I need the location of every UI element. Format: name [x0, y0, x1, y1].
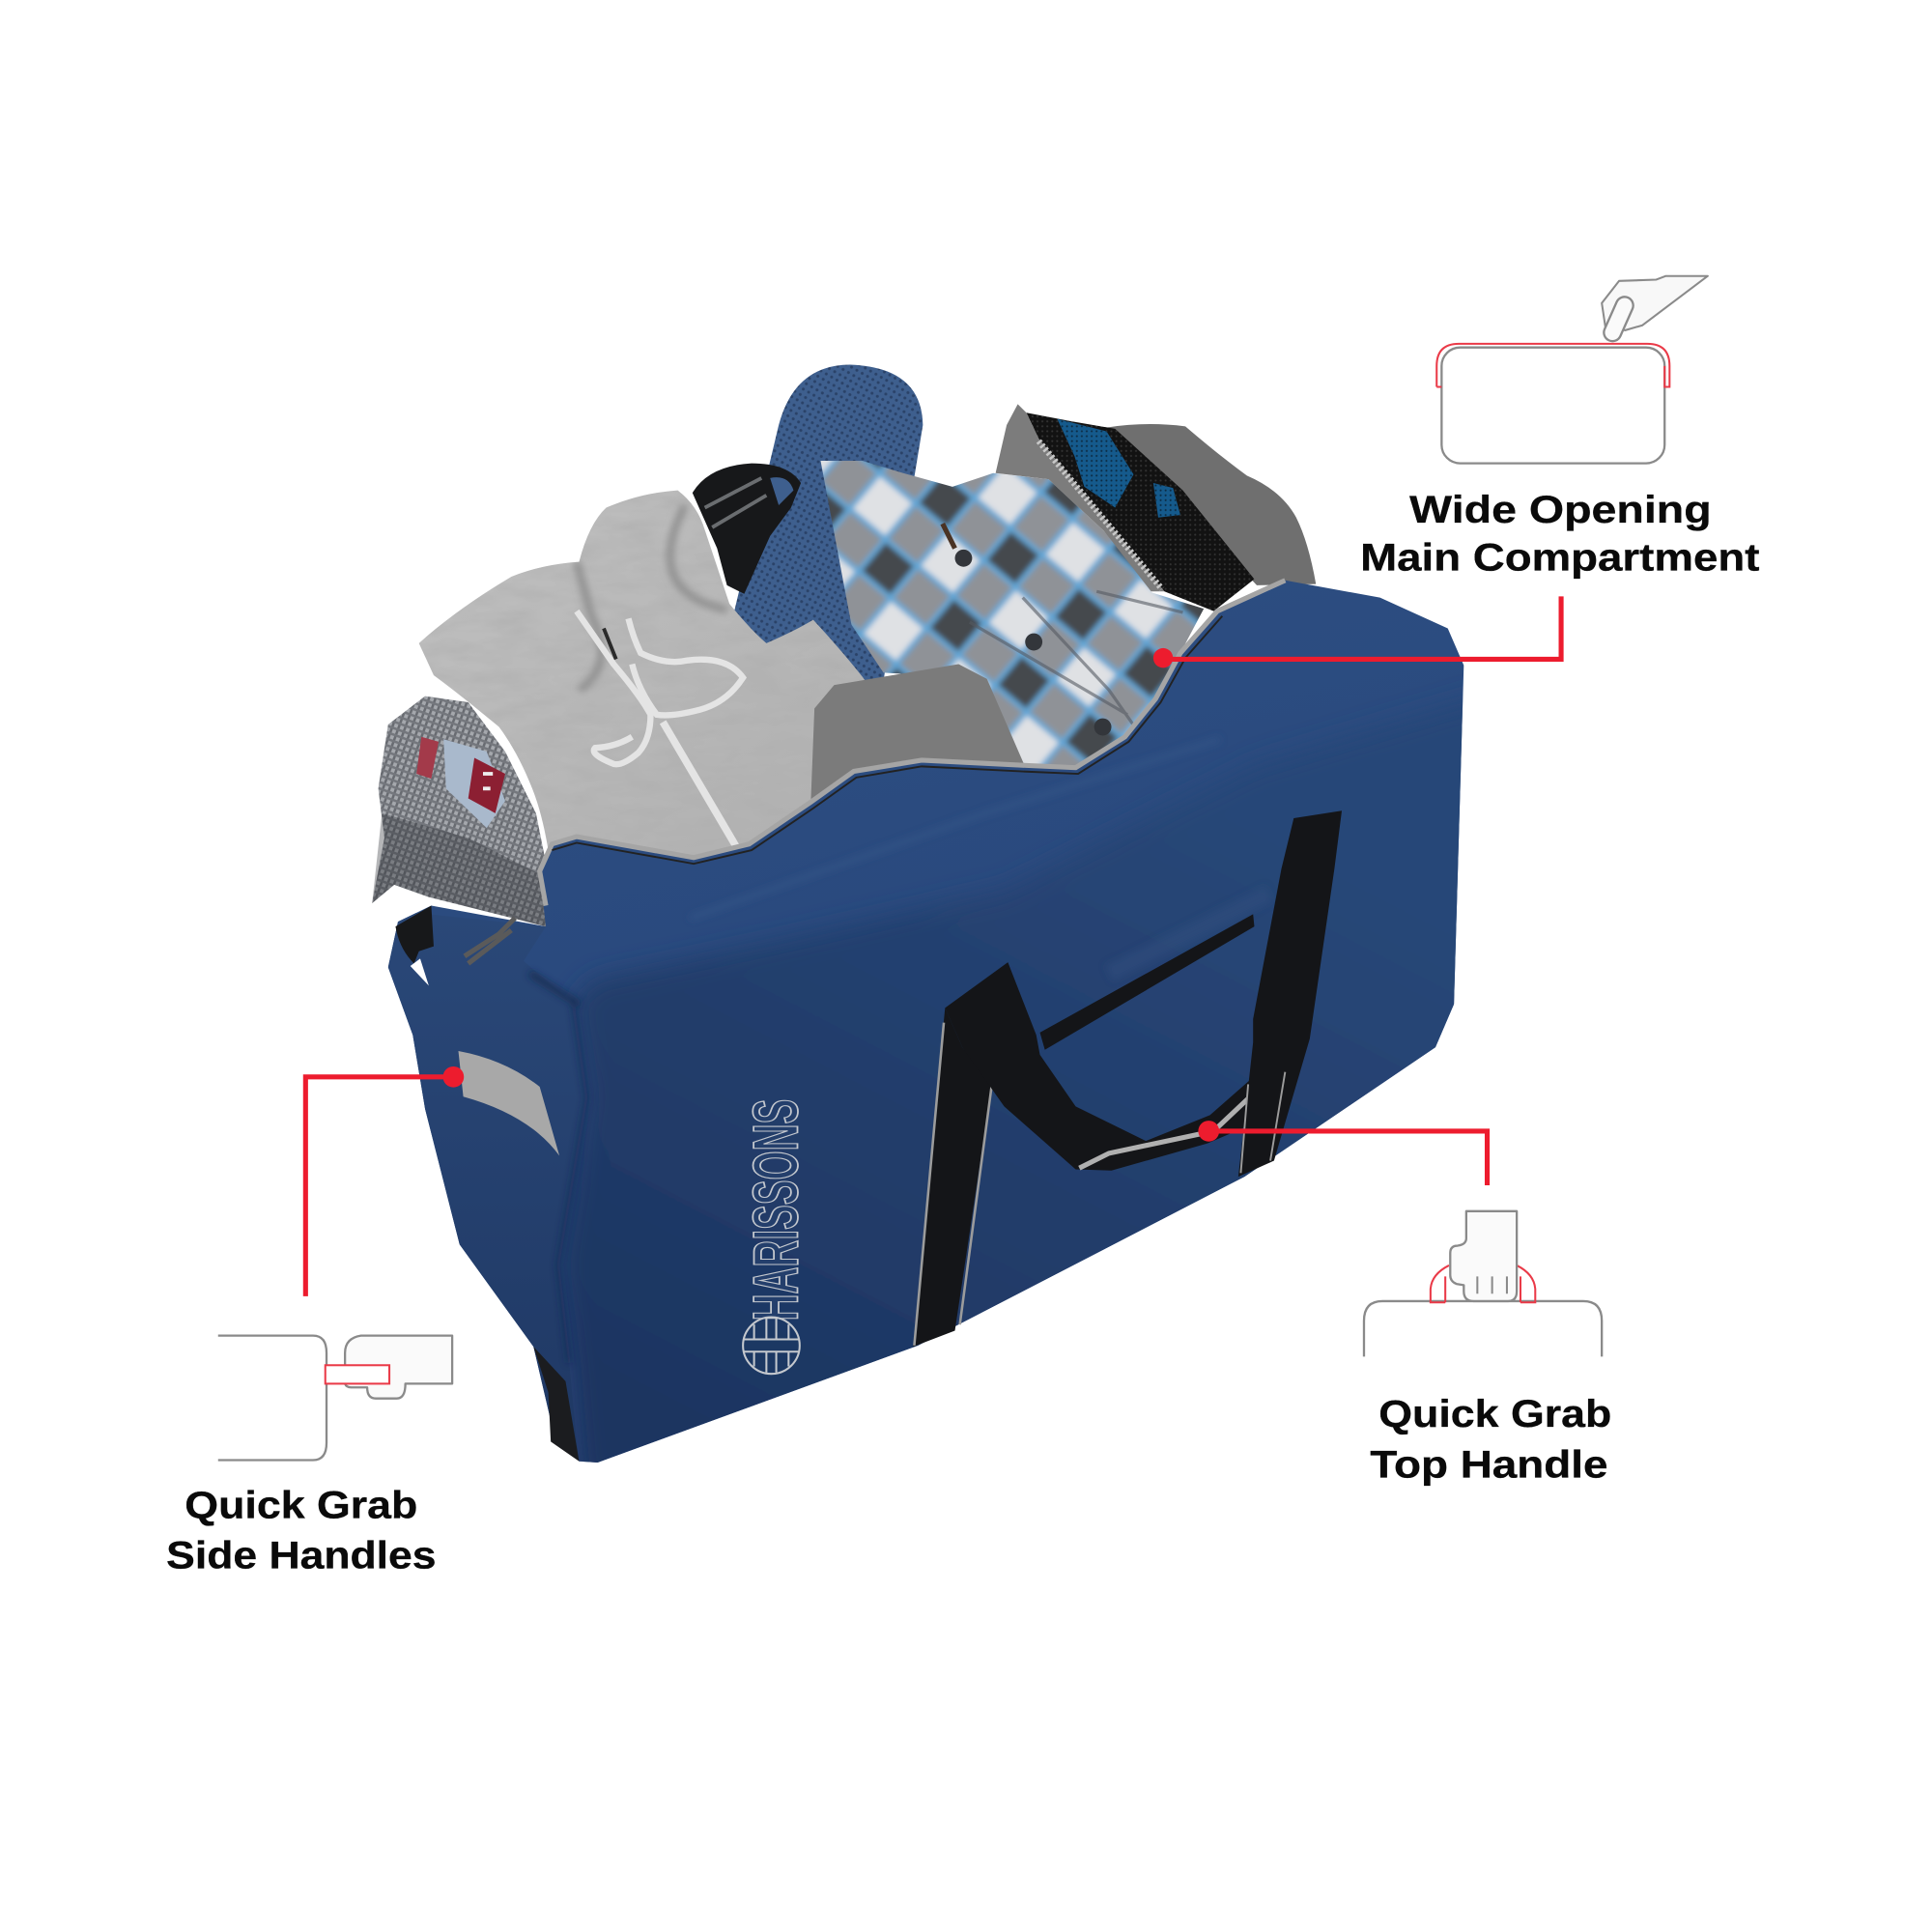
duffel body: [370, 581, 1503, 1491]
handle loop: [945, 962, 1276, 1171]
shirt buttons: [955, 550, 1112, 735]
label: quick grab top handle: [1370, 1393, 1611, 1486]
product photo: packed duffel bag: [370, 365, 1503, 1491]
label: quick grab side handles: Quick Grab: [185, 1484, 417, 1526]
icon hand: [1602, 276, 1708, 330]
label: quick grab top handle: Quick Grab: [1378, 1393, 1611, 1435]
callout: wide opening pointer: [1153, 596, 1561, 668]
reflective piping: [914, 1023, 992, 1346]
duffel side panel: [388, 913, 578, 1447]
logo emblem: [743, 1318, 800, 1374]
bottom corner black trim: [533, 1347, 579, 1462]
black stripe left: [913, 1008, 992, 1347]
shirt placket seams: [970, 589, 1183, 724]
label: quick grab top handle: Top Handle: [1370, 1443, 1608, 1486]
icon: side handle grab: [218, 1336, 452, 1460]
label: wide opening main compartment: Wide Opening: [1409, 489, 1712, 531]
zipper pull: [465, 918, 515, 963]
label: wide opening main compartment: Main Compartment: [1360, 537, 1759, 580]
folded checked shirt: [372, 696, 546, 926]
brand logo: HARISSONS: [740, 1099, 811, 1374]
duffel front face: [558, 690, 1503, 1491]
brand logo: HARISSONS: HARISSONS: [740, 1099, 811, 1321]
zipper trim: [540, 581, 1285, 906]
side handle gap: [411, 958, 429, 985]
side handle: black strap top: [395, 906, 434, 963]
rolled mat: [733, 365, 923, 702]
black stripe right: [1238, 810, 1342, 1177]
packing cube: black mesh: [996, 404, 1254, 611]
label: quick grab side handles: [166, 1484, 437, 1577]
fabric fold highlights: [527, 970, 589, 1358]
plaid shirt: [821, 461, 1204, 765]
jacket: grey shell: [1106, 424, 1316, 585]
callout: side handle pointer: [305, 1066, 464, 1296]
connecting band: [1040, 914, 1254, 1050]
duffel body silhouette: [388, 581, 1463, 1463]
grey towel: [810, 665, 1024, 804]
label: quick grab side handles: Side Handles: [166, 1535, 437, 1577]
water bottle: [693, 464, 801, 594]
callout: top handle pointer: [1198, 1121, 1488, 1185]
icon: zipper opening: [1436, 276, 1708, 464]
icon: top handle grab: [1364, 1211, 1602, 1356]
grey hoodie: [419, 491, 866, 856]
top handles: [913, 810, 1342, 1347]
label: wide opening main compartment: [1360, 489, 1759, 580]
hoodie zipper and drawstrings: [577, 611, 743, 848]
side handle: grey grip: [458, 1051, 559, 1155]
